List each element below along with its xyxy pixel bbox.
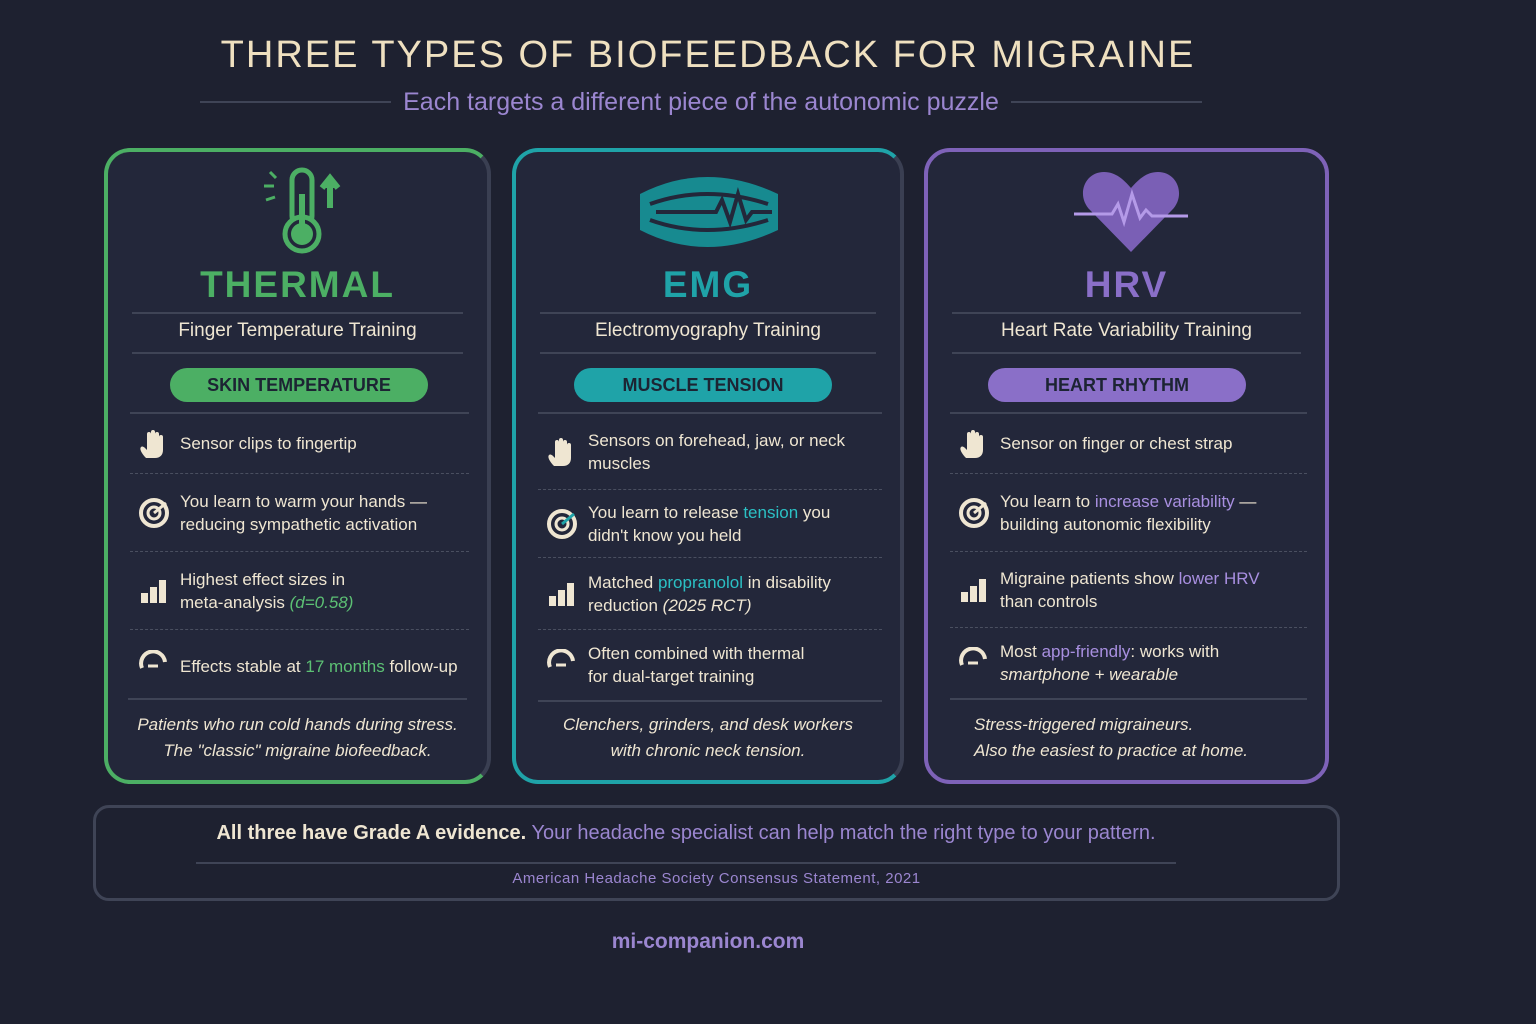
bullet list: reduction (2025 RCT) <box>588 596 751 614</box>
bullet list: Sensor clips to fingertip <box>180 434 357 453</box>
bullet list: Often combined with thermal <box>588 644 804 663</box>
callout: evidence <box>93 805 1340 901</box>
icon: muscle <box>640 177 778 247</box>
best for: Patients who run cold hands during stress. <box>137 715 458 734</box>
bullet list: muscles <box>588 454 650 472</box>
bullet list <box>950 412 1307 700</box>
best for <box>563 715 853 760</box>
pill: HEART RHYTHM <box>1045 375 1189 395</box>
bullet list: smartphone + wearable <box>1000 665 1178 684</box>
heading: EMG <box>663 264 753 305</box>
evidence text <box>196 822 1176 864</box>
bullet list: You learn to increase variability — <box>1000 492 1256 510</box>
bullet list: Effects stable at 17 months follow-up <box>180 656 458 676</box>
bullet list: for dual-target training <box>588 667 754 686</box>
bullet list: meta-analysis (d=0.58) <box>180 592 353 612</box>
bullet list: building autonomic flexibility <box>1000 514 1211 534</box>
heading: THERMAL <box>200 264 395 305</box>
pill <box>988 368 1246 402</box>
bullet list: You learn to release tension you <box>588 502 830 522</box>
bullet list: Sensor on finger or chest strap <box>1000 434 1232 453</box>
bullet list: Matched propranolol in disability <box>588 572 831 592</box>
bullet list: didn't know you held <box>588 526 742 544</box>
panel: EMG: Electromyography Training <box>595 320 821 341</box>
bullet list: reducing sympathetic activation <box>180 514 417 534</box>
panel: HRV: Heart Rate Variability Training <box>1001 320 1252 341</box>
bullet list: Most app-friendly: works with <box>1000 642 1219 661</box>
best for: Also the easiest to practice at home. <box>974 741 1248 760</box>
bullet list: Migraine patients show lower HRV <box>1000 568 1260 588</box>
best for: Clenchers, grinders, and desk workers <box>563 715 853 734</box>
pill <box>170 368 428 402</box>
panel: thermal <box>104 148 491 784</box>
pill <box>574 368 832 402</box>
bullet list <box>130 412 469 702</box>
panel: HRV <box>924 148 1329 784</box>
citation: American Headache Society Consensus Statement, 2021 <box>512 870 921 887</box>
best for <box>973 715 1248 760</box>
bullet list: than controls <box>1000 592 1097 610</box>
pill: SKIN TEMPERATURE <box>207 375 391 395</box>
best for <box>128 698 467 764</box>
icon: heart <box>1074 172 1188 252</box>
best for: Stress-triggered migraineurs. <box>974 715 1193 734</box>
panel: EMG <box>512 148 904 784</box>
bullet list: Highest effect sizes in <box>180 570 345 588</box>
bullet list <box>538 412 882 702</box>
panel: thermal: Finger Temperature Training <box>178 320 417 341</box>
best for: with chronic neck tension. <box>611 741 805 760</box>
best for: The "classic" migraine biofeedback. <box>163 741 432 760</box>
footer url: mi-companion.com <box>612 930 804 953</box>
icon: thermometer <box>264 168 340 254</box>
title: THREE TYPES OF BIOFEEDBACK FOR MIGRAINE <box>221 34 1195 76</box>
heading: HRV <box>1085 264 1168 305</box>
pill: MUSCLE TENSION <box>622 375 784 395</box>
bullet list: You learn to warm your hands — <box>180 492 427 510</box>
evidence text: All three have Grade A evidence. Your headache specialist can help match the right type to your pattern. <box>216 822 1156 844</box>
bullet list: Sensors on forehead, jaw, or neck <box>588 430 845 450</box>
subtitle: Each targets a different piece of the autonomic puzzle <box>403 88 999 116</box>
